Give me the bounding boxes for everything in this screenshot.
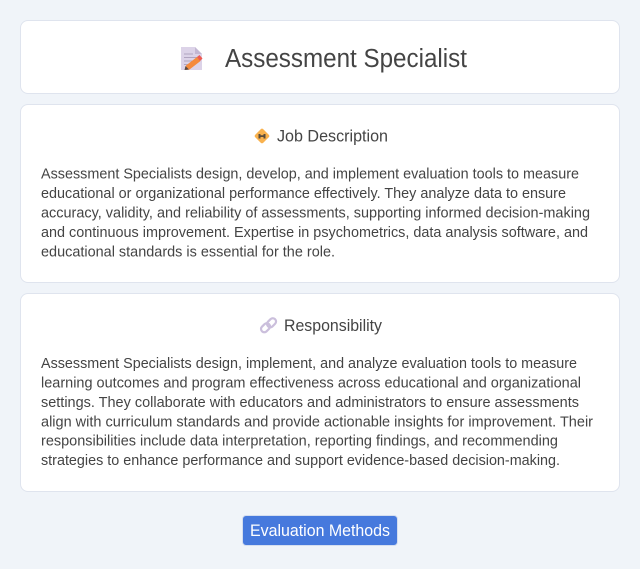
heading: job description: Job Description	[277, 128, 388, 146]
icon: orange diamond sign	[254, 128, 270, 144]
heading: responsibility: Responsibility	[284, 317, 383, 335]
icon: chain link	[260, 317, 277, 334]
text block: responsibility body: responsibilities include data interpretation, reporting findings, and recommending	[41, 434, 558, 450]
text block: job description body: and continuous improvement. Expertise in psychometrics, data analysis software, and	[41, 225, 588, 241]
text block: responsibility body: settings. They collaborate with educators and administrators to ensure assessments	[41, 395, 579, 411]
text block: job description body: educational standards is essential for the role.	[41, 244, 335, 260]
text block: job description body: accuracy, validity, and reliability of assessments, supporting informed decision-making	[41, 206, 590, 222]
text block: responsibility body: learning outcomes and program effectiveness across educational and organizational	[41, 376, 581, 392]
button: evaluation methods	[242, 515, 398, 546]
text block: responsibility body: Assessment Specialists design, implement, and analyze evaluation tools to measure	[41, 356, 577, 372]
panel: title card	[20, 20, 620, 94]
icon: document with pencil	[181, 47, 202, 70]
title: Assessment Specialist	[225, 45, 467, 73]
text block: responsibility body: strategies to enhance performance and support evidence-based decision-making.	[41, 453, 560, 469]
text block: job description body	[41, 167, 590, 260]
text block: responsibility body	[41, 356, 593, 469]
text block: responsibility body: align with curriculum standards and provide actionable insights for improvement. Their	[41, 415, 593, 431]
text block: job description body: Assessment Specialists design, develop, and implement evaluation tools to measure	[41, 167, 579, 183]
panel: responsibility	[20, 293, 620, 492]
button: evaluation methods: Evaluation Methods	[250, 522, 390, 540]
text block: job description body: educational or organizational performance effectively. They analyze data to ensure	[41, 186, 566, 202]
panel: job description	[20, 104, 620, 283]
